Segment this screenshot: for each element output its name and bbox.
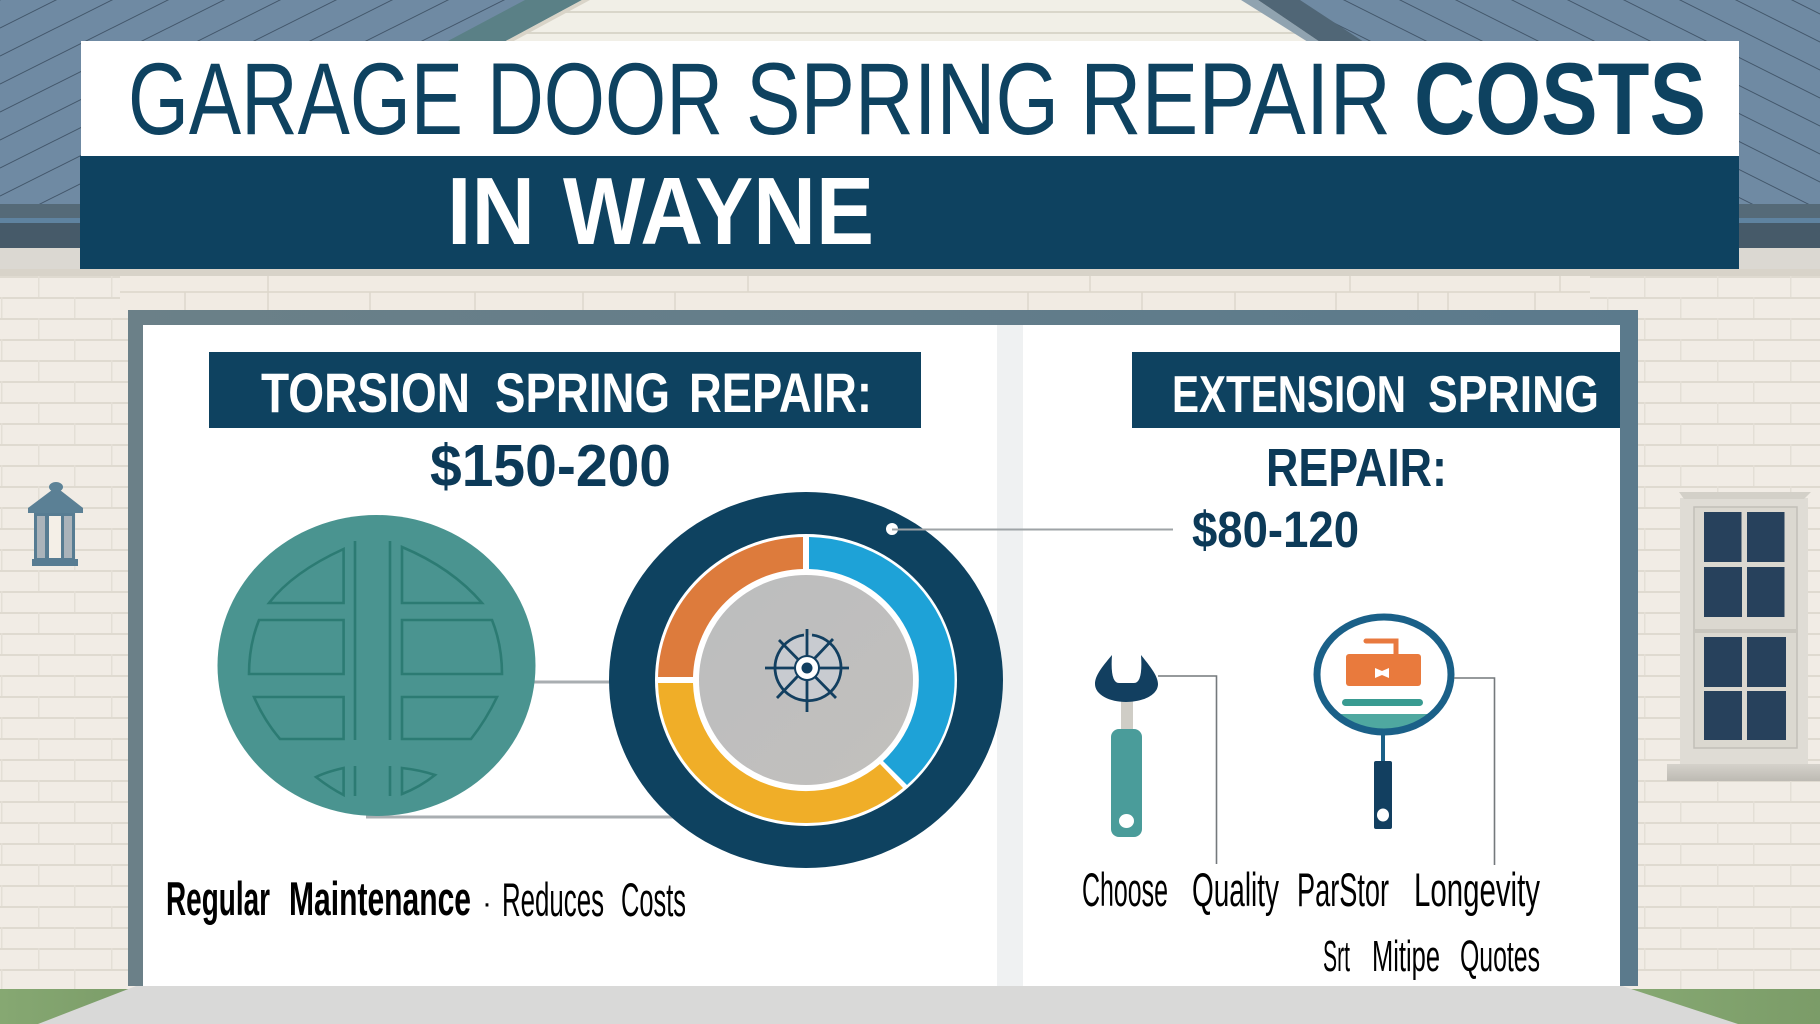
left roof bbox=[0, 0, 590, 210]
window panes bbox=[1704, 512, 1786, 740]
window sill bbox=[1667, 764, 1820, 781]
yellow segment bbox=[658, 683, 903, 823]
maintenance tip text: Regular bbox=[166, 872, 270, 925]
title line one: GARAGE bbox=[128, 42, 463, 156]
garage door frame bbox=[128, 310, 1638, 986]
wall band under gutter bbox=[0, 248, 1820, 276]
tip text: choose quality parts: Choose bbox=[1082, 863, 1168, 916]
tip text: multiple quotes: Srt bbox=[1323, 932, 1350, 981]
icon: wrench bbox=[1095, 655, 1158, 837]
connector lines bbox=[366, 682, 680, 817]
title line two: IN bbox=[447, 158, 535, 265]
title line two bbox=[447, 158, 874, 265]
brick wall bbox=[0, 248, 1820, 1024]
right roof bbox=[1241, 0, 1820, 210]
lawn right bbox=[1630, 989, 1820, 1024]
title line two: WAYNE bbox=[563, 158, 874, 265]
extension heading second line: REPAIR: bbox=[1266, 438, 1447, 498]
panel: extension spring bbox=[886, 352, 1620, 981]
title navy bar bbox=[80, 156, 1739, 269]
title line one: DOOR bbox=[487, 42, 723, 156]
torsion heading bbox=[209, 352, 921, 428]
door panel bbox=[143, 325, 1620, 986]
maintenance tip text: · bbox=[482, 887, 492, 920]
tip text: choose quality parts: ParStor bbox=[1297, 863, 1389, 916]
tip text: choose quality parts bbox=[1082, 863, 1540, 916]
blue segment bbox=[809, 537, 955, 785]
driveway bbox=[38, 986, 1738, 1024]
icon: magnifier with toolbox bbox=[1317, 617, 1451, 829]
wrench leader line bbox=[1158, 676, 1216, 864]
tip text: choose quality parts: Longevity bbox=[1414, 863, 1540, 916]
title line one: COSTS bbox=[1414, 42, 1706, 156]
tip text: choose quality parts: Quality bbox=[1192, 863, 1279, 916]
maintenance tip text: Costs bbox=[621, 873, 686, 926]
tip text: multiple quotes: Mitipe bbox=[1372, 932, 1440, 981]
window bbox=[1667, 492, 1820, 781]
right gutter bbox=[1730, 204, 1820, 248]
panel: torsion spring bbox=[166, 352, 1003, 926]
left gutter bbox=[0, 204, 90, 248]
torsion price: $150-200 bbox=[430, 433, 671, 499]
maintenance tip text bbox=[166, 872, 686, 926]
donut chart bbox=[609, 492, 1003, 868]
wheel icon bbox=[765, 629, 849, 712]
tip text: multiple quotes: Quotes bbox=[1460, 932, 1540, 981]
green door disc bbox=[218, 515, 536, 816]
center disc bbox=[699, 575, 913, 785]
extension heading: EXTENSION bbox=[1172, 366, 1406, 424]
lawn left bbox=[0, 989, 140, 1024]
lantern icon bbox=[28, 482, 83, 566]
extension heading: SPRING bbox=[1428, 366, 1599, 424]
title line one: REPAIR bbox=[1080, 42, 1391, 156]
torsion heading: TORSION bbox=[261, 361, 470, 424]
title line one bbox=[128, 42, 1706, 156]
price callout bbox=[886, 523, 1173, 535]
tip text: multiple quotes bbox=[1323, 932, 1540, 981]
gable wall bbox=[480, 0, 1340, 42]
magnifier leader line bbox=[1454, 678, 1494, 865]
center divider bbox=[997, 325, 1023, 986]
extension price: $80-120 bbox=[1192, 501, 1359, 558]
siding strip above door bbox=[120, 276, 1590, 310]
orange segment bbox=[658, 537, 803, 677]
ground bbox=[0, 986, 1820, 1024]
title white bar bbox=[81, 41, 1739, 157]
title banner bbox=[80, 41, 1739, 269]
maintenance tip text: Reduces bbox=[502, 873, 604, 926]
torsion heading: REPAIR: bbox=[689, 361, 872, 424]
title line one: SPRING bbox=[746, 42, 1059, 156]
torsion heading: SPRING bbox=[495, 361, 670, 424]
maintenance tip text: Maintenance bbox=[289, 872, 471, 925]
extension heading bbox=[1132, 352, 1620, 428]
